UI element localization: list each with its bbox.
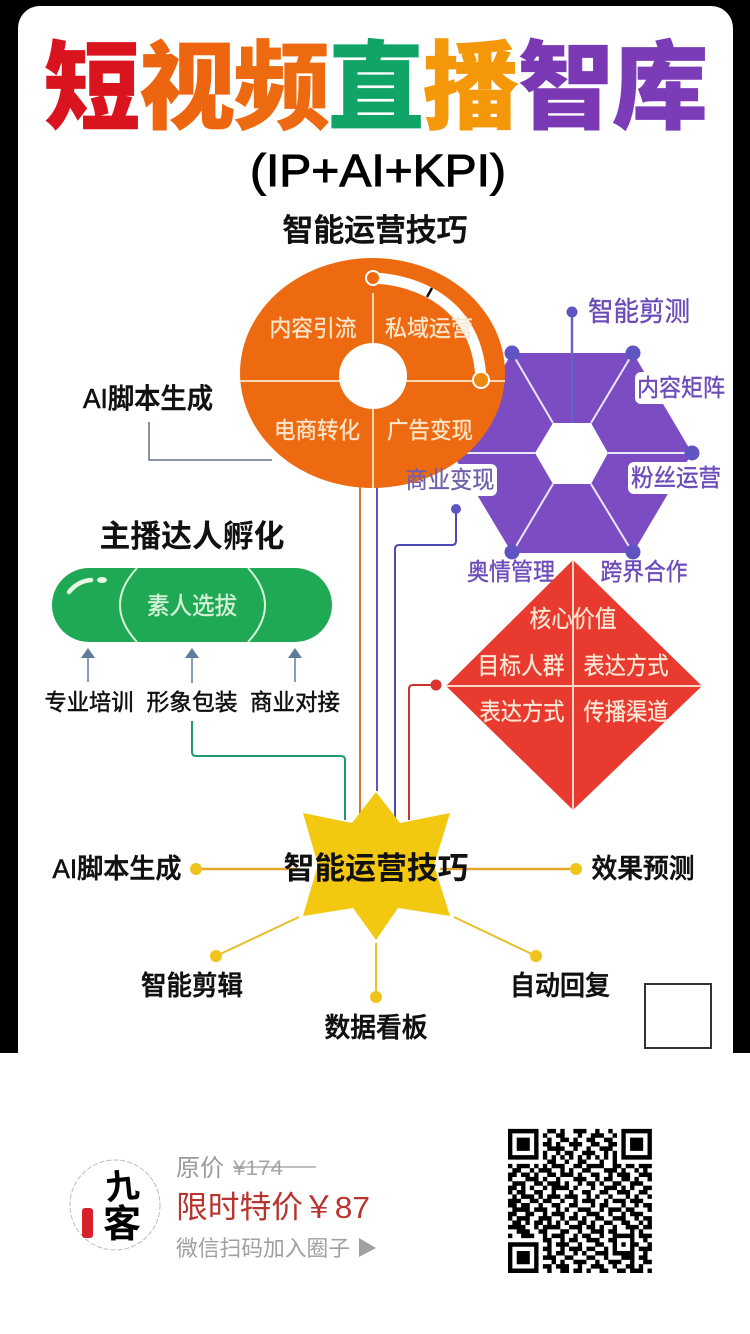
logo calligraphy: 客 bbox=[103, 1204, 141, 1246]
arc end node bbox=[473, 372, 489, 388]
top connector bbox=[571, 312, 573, 423]
heading: 主播达人孵化: 主播达人孵化 bbox=[100, 519, 284, 554]
arc start node bbox=[366, 271, 380, 285]
heading: 智能运营技巧: 智能运营技巧 bbox=[282, 213, 468, 248]
hexagon spokes bbox=[452, 353, 692, 553]
hexagon labels: 奥情管理 bbox=[467, 559, 555, 586]
title: 智 bbox=[518, 35, 614, 142]
label: 商业变现: 商业变现 bbox=[406, 467, 494, 494]
hexagon labels bbox=[467, 297, 725, 586]
logo calligraphy bbox=[103, 1166, 141, 1246]
panel: red diamond bbox=[446, 560, 702, 810]
strike line bbox=[233, 1166, 316, 1168]
hexagon body bbox=[452, 353, 692, 553]
diamond labels bbox=[478, 606, 668, 726]
play triangle bbox=[359, 1238, 376, 1257]
diamond labels: 目标人群 bbox=[478, 653, 564, 680]
diamond labels: 表达方式 bbox=[584, 653, 668, 680]
white progress arc bbox=[373, 278, 481, 380]
hexagon centre bbox=[535, 423, 608, 484]
spokes bbox=[196, 868, 576, 870]
hexagon labels: 跨界合作 bbox=[600, 559, 688, 586]
diamond labels: 核心价值 bbox=[530, 606, 616, 633]
title: 播 bbox=[423, 35, 519, 142]
hexagon labels: 粉丝运营 bbox=[631, 465, 721, 492]
panel: yellow star hub bbox=[190, 792, 582, 1003]
hexagon label backgrounds bbox=[405, 372, 731, 496]
title: 视 bbox=[139, 35, 235, 142]
hub labels bbox=[52, 854, 694, 1043]
hexagon labels: 内容矩阵 bbox=[637, 375, 725, 402]
logo calligraphy: 九 bbox=[103, 1166, 141, 1208]
hexagon labels: 智能剪测 bbox=[588, 297, 690, 327]
pill highlight bbox=[69, 580, 91, 592]
offer price: 限时特价￥87 bbox=[176, 1190, 370, 1225]
main white card bbox=[18, 6, 733, 1076]
footer background bbox=[0, 1053, 750, 1334]
title: 库 bbox=[612, 35, 708, 142]
pill input labels: 专业培训 bbox=[44, 689, 134, 715]
hub labels: 智能剪辑 bbox=[141, 971, 243, 1001]
diamond labels: 表达方式 bbox=[480, 699, 564, 726]
diagonal spokes bbox=[216, 917, 536, 997]
pill label: 素人选拔 bbox=[147, 593, 237, 620]
hub labels: 效果预测 bbox=[592, 854, 694, 884]
arc tick bbox=[427, 288, 432, 297]
circle labels: 广告变现 bbox=[387, 417, 473, 443]
pill input labels: 形象包装 bbox=[146, 689, 238, 715]
panel: purple hexagon bbox=[405, 297, 731, 586]
circle labels: 内容引流 bbox=[270, 315, 356, 341]
pill input labels bbox=[44, 689, 340, 715]
spoke nodes bbox=[190, 863, 582, 1003]
pill highlight dot bbox=[97, 577, 107, 583]
circle labels: 电商转化 bbox=[274, 417, 360, 443]
arrows into pill bbox=[81, 648, 302, 683]
logo seal bbox=[82, 1208, 93, 1238]
star shape bbox=[303, 792, 450, 940]
price text bbox=[176, 1155, 376, 1261]
label: AI脚本生成 with connector: AI脚本生成 bbox=[83, 383, 213, 414]
hexagon nodes bbox=[504, 306, 700, 560]
QR code bbox=[508, 1131, 652, 1271]
diamond body bbox=[446, 560, 702, 810]
panel: green pill bbox=[52, 568, 332, 642]
title: 直 bbox=[328, 35, 424, 142]
pill input labels: 商业对接 bbox=[250, 689, 340, 715]
subtitle: (IP+AI+KPI) bbox=[250, 145, 506, 196]
title: 频 bbox=[234, 35, 330, 142]
hub labels: 数据看板 bbox=[324, 1013, 428, 1043]
circle dividers bbox=[240, 293, 505, 488]
pill body bbox=[52, 568, 332, 642]
circle centre bbox=[339, 343, 407, 409]
label: AI脚本生成 with connector bbox=[83, 383, 272, 460]
price text: 原价 bbox=[176, 1155, 224, 1182]
diamond dividers bbox=[446, 560, 702, 810]
original price: ¥174 bbox=[232, 1157, 283, 1180]
diamond labels: 传播渠道 bbox=[584, 699, 668, 726]
hub labels: 自动回复 bbox=[510, 971, 610, 1001]
pill inner arcs bbox=[120, 568, 265, 642]
connector lines to star bbox=[192, 486, 461, 820]
empty square box bbox=[645, 984, 711, 1048]
panel: orange circle bbox=[240, 258, 505, 488]
circle labels bbox=[270, 315, 473, 443]
circle labels: 私域运营 bbox=[385, 315, 473, 341]
title: 短 bbox=[44, 35, 140, 142]
circle body bbox=[240, 258, 505, 488]
title bbox=[44, 35, 708, 142]
star label: 智能运营技巧 bbox=[284, 851, 468, 886]
logo bbox=[70, 1160, 160, 1250]
hub labels: AI脚本生成 bbox=[52, 854, 182, 884]
scan call to action: 微信扫码加入圈子 bbox=[176, 1236, 350, 1261]
